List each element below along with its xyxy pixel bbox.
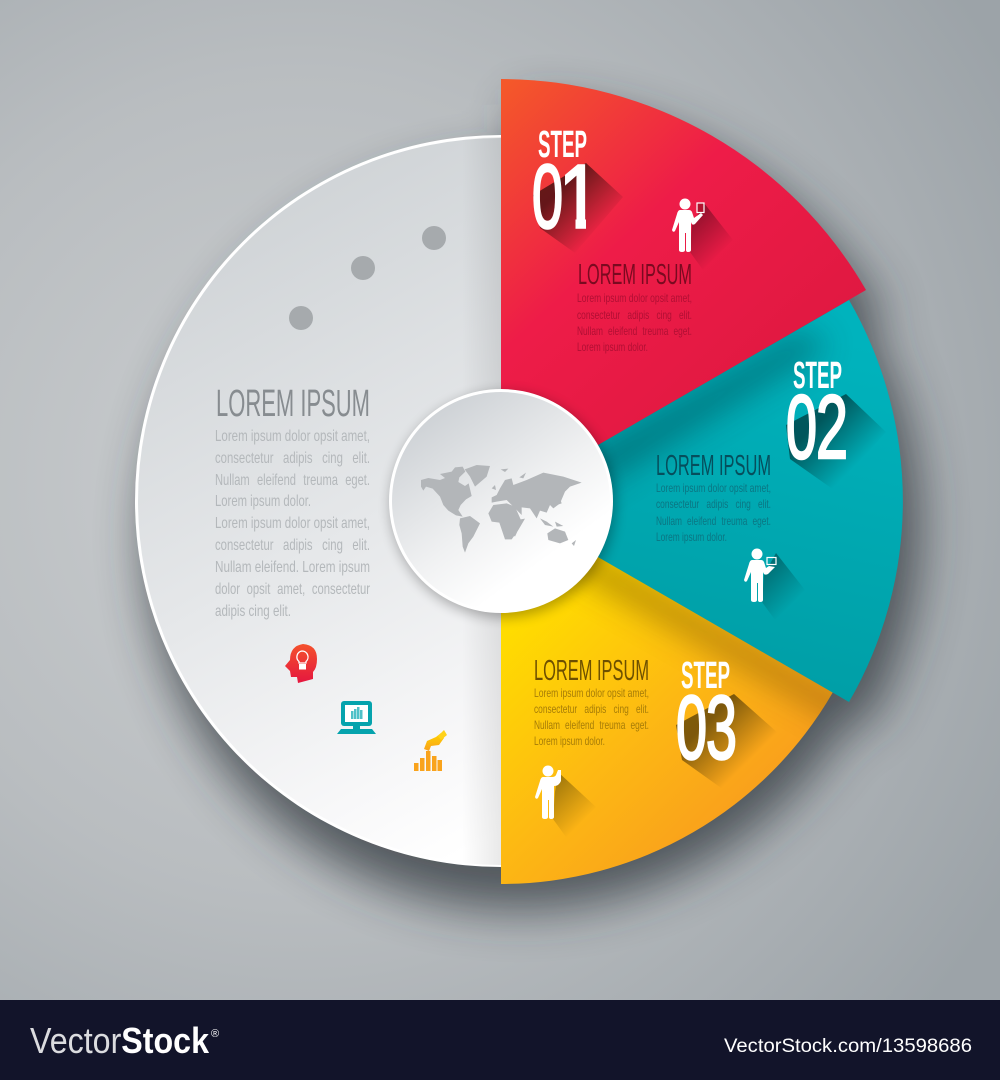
text block: left body: consectetur adipis cing elit. [215, 537, 370, 554]
panel: step 02 teal sector [598, 300, 903, 702]
panel: step 03 yellow sector [501, 557, 833, 884]
long shadow: person 1 [690, 203, 733, 270]
text block: left body: Lorem ipsum dolor opsit amet, [215, 515, 370, 532]
text block: left body: adipis cing elit. [215, 603, 291, 620]
icon: person with phone [535, 766, 561, 819]
panel: gray disc [135, 130, 502, 870]
panel: step 01 red sector [501, 79, 866, 445]
text block: step 02: consectetur adipis cing elit. [656, 497, 771, 511]
text block: left body: dolor opsit amet, consectetur [215, 581, 370, 598]
footer bar [0, 1000, 1000, 1080]
number: 01 [533, 163, 586, 230]
text block: left body: Nullam eleifend. Lorem ipsum [215, 559, 370, 576]
hub shadow [390, 392, 616, 618]
text block: step 02: Nullam eleifend treuma eget. [656, 514, 771, 528]
heading: step 01: LOREM IPSUM [578, 259, 692, 291]
drop shadow of chart [145, 105, 921, 910]
dots [289, 226, 446, 330]
footer logo: ® [211, 1028, 219, 1040]
text block: step 02: Lorem ipsum dolor opsit amet, [656, 481, 771, 495]
long shadow: person 2 [762, 553, 805, 620]
footer logo: VectorStock [30, 1020, 210, 1061]
long shadow: 01 [533, 163, 623, 253]
text block: left body [215, 428, 370, 620]
heading: left lorem ipsum: LOREM IPSUM [216, 383, 370, 425]
text block: step 02 [656, 481, 771, 544]
text block: step 01: Lorem ipsum dolor. [577, 340, 648, 354]
panel: step 02 teal sector: STEP [793, 355, 842, 397]
number: 01: 1 [559, 148, 600, 248]
number: 03: 3 [706, 678, 737, 778]
number: 01: 0 [532, 148, 563, 248]
text block: step 03: Nullam eleifend treuma eget. [534, 718, 649, 732]
text block: left body: Lorem ipsum dolor opsit amet, [215, 428, 370, 445]
long shadow: person 3 [553, 772, 596, 837]
text block: step 03: Lorem ipsum dolor opsit amet, [534, 686, 649, 700]
footer url: VectorStock.com/13598686 [724, 1035, 972, 1057]
panel: step 01 red sector: STEP [538, 124, 587, 166]
icon: world map [421, 465, 582, 553]
text block: step 01: consectetur adipis cing elit. [577, 308, 692, 322]
panel: center hub [389, 389, 613, 613]
heading: step 02: LOREM IPSUM [656, 450, 771, 482]
long shadow: 02 [786, 394, 886, 490]
text block: step 01 [577, 291, 692, 354]
text block: step 03: consectetur adipis cing elit. [534, 702, 649, 716]
heading: step 03: LOREM IPSUM [534, 655, 649, 687]
text block: step 02: Lorem ipsum dolor. [656, 530, 727, 544]
text block: step 01: Lorem ipsum dolor opsit amet, [577, 291, 692, 305]
text block: step 03 [534, 686, 649, 748]
text block: step 01: Nullam eleifend treuma eget. [577, 324, 692, 338]
number: 02: 0 [786, 378, 817, 478]
icon: hand and bars [414, 730, 447, 771]
icon: person with laptop [744, 548, 776, 602]
number: 03: 0 [676, 678, 707, 778]
long shadow: 03 [676, 694, 778, 790]
number: 02: 2 [816, 378, 848, 478]
text block: left body: Lorem ipsum dolor. [215, 493, 311, 510]
icon: computer chart [337, 701, 376, 734]
text block: left body: Nullam eleifend treuma eget. [215, 472, 370, 489]
text block: step 03: Lorem ipsum dolor. [534, 734, 605, 748]
text block: left body: consectetur adipis cing elit. [215, 450, 370, 467]
panel: step 03 yellow sector: STEP [681, 655, 730, 697]
icon: person with tablet [672, 198, 704, 252]
icon: head with bulb [285, 644, 317, 683]
